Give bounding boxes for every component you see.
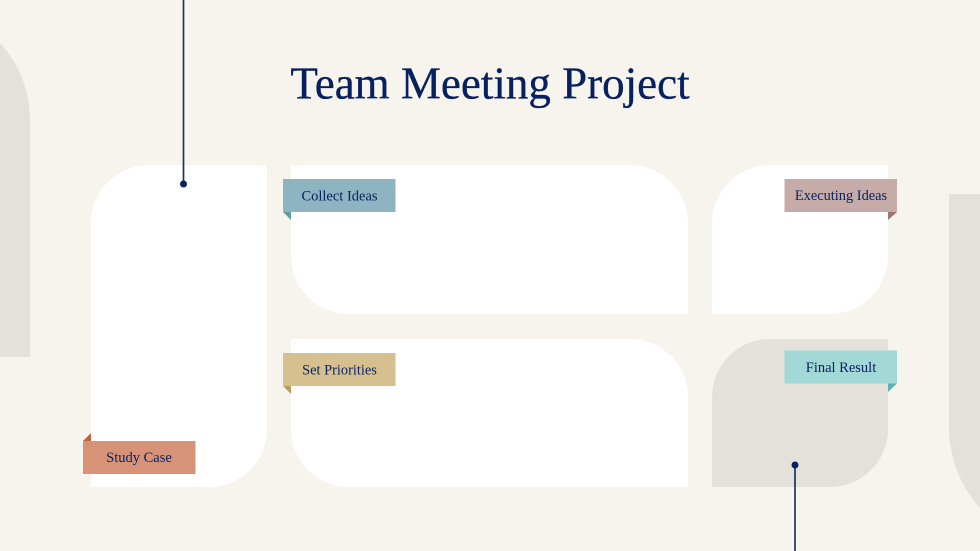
panel: final result — [712, 339, 897, 551]
label: study case: Study Case — [106, 450, 172, 466]
connector line with dot — [792, 462, 798, 551]
label: set priorities: Set Priorities — [302, 362, 377, 378]
right background shape — [949, 194, 980, 508]
panel: set priorities — [283, 339, 688, 487]
label: final result — [784, 350, 897, 392]
label: set priorities — [283, 353, 396, 394]
left background shape — [0, 43, 30, 357]
label: final result: Final Result — [806, 360, 876, 376]
label: study case — [83, 433, 196, 474]
label: collect ideas: Collect Ideas — [301, 188, 378, 204]
label: executing ideas: Executing Ideas — [795, 188, 888, 204]
panel: executing ideas — [712, 165, 897, 314]
title: Team Meeting Project — [290, 58, 690, 108]
panel: study case — [83, 0, 267, 487]
label: collect ideas — [283, 179, 396, 220]
label: executing ideas — [784, 179, 897, 220]
connector line with dot — [180, 0, 187, 188]
panel: collect ideas — [283, 165, 688, 314]
